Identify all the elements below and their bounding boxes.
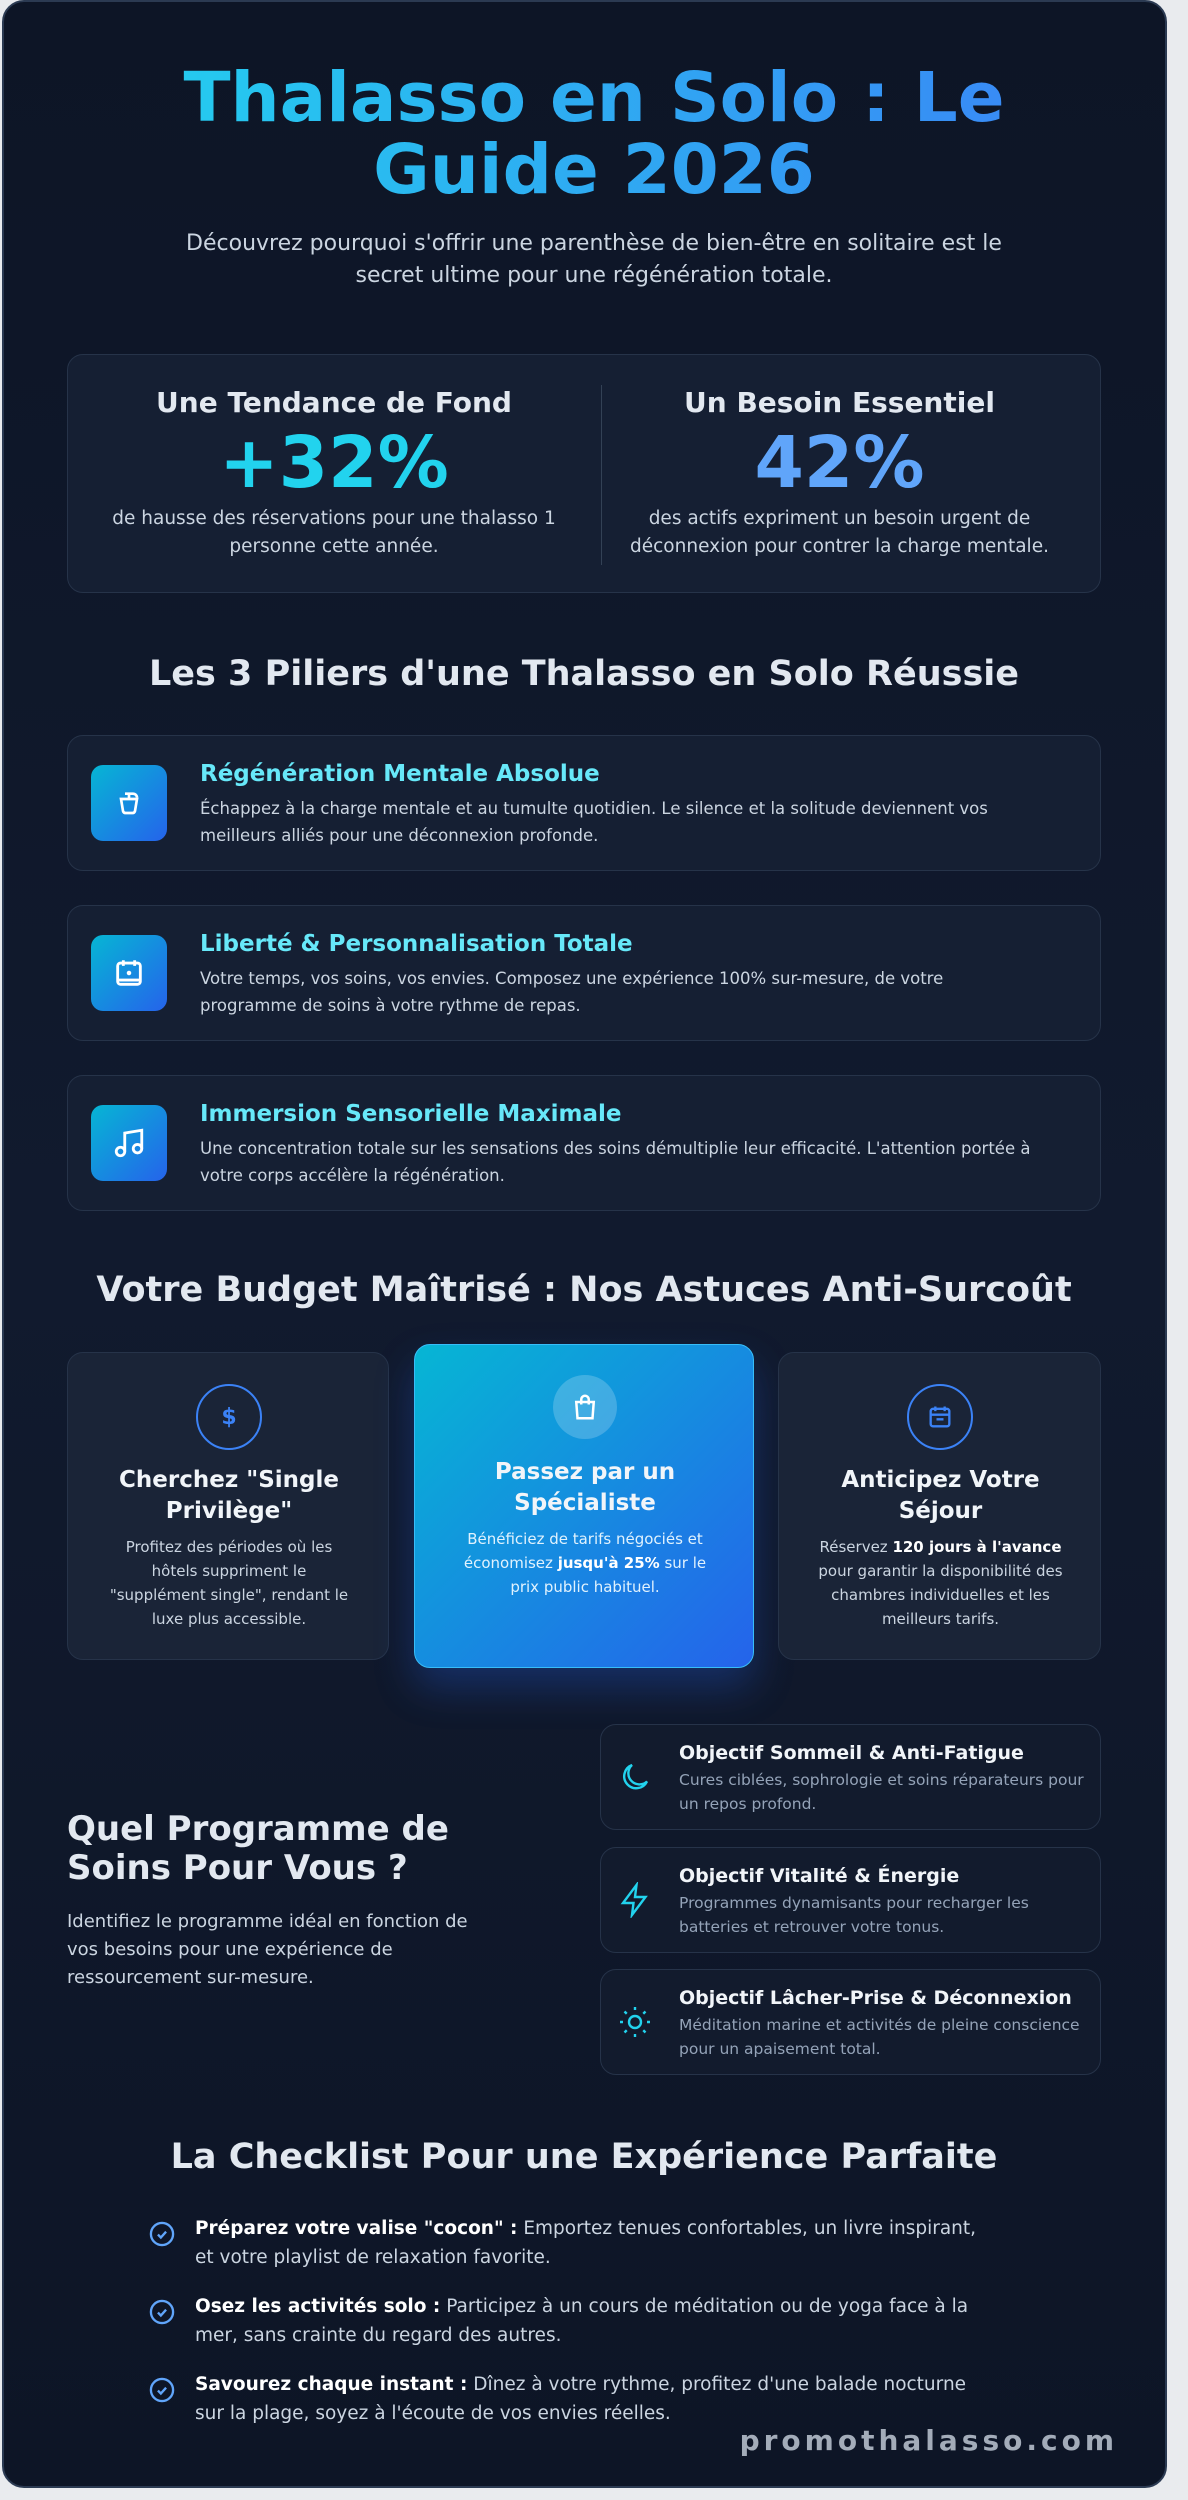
icon: sun <box>620 2007 650 2037</box>
objective 3: Objectif Lâcher-Prise & Déconnexion <box>679 1987 1072 2009</box>
icon: dollar: $ <box>221 1404 237 1430</box>
program intro: Identifiez le programme idéal en fonction de vos besoins pour une expérience de ressourcement sur-mesure. <box>67 1911 468 1988</box>
item 1: Préparez votre valise "cocon" : Emportez tenues confortables, un livre inspirant, et votre playlist de relaxation favorite. <box>195 2218 976 2268</box>
stat: tendance <box>112 386 556 557</box>
pillar 3 <box>67 1075 1101 1211</box>
objective 1: Objectif Sommeil & Anti-Fatigue <box>679 1742 1024 1764</box>
pillar 1: Régénération Mentale Absolue <box>200 761 600 787</box>
pillar 3: Une concentration totale sur les sensations des soins démultiplie leur efficacité. L'attention portée à votre corps accélère la régénération. <box>200 1139 1030 1185</box>
objective 2 <box>600 1847 1101 1953</box>
pillar 1 <box>67 735 1101 871</box>
item 2: Osez les activités solo : Participez à un cours de méditation ou de yoga face à la mer, sans crainte du regard des autres. <box>195 2296 968 2346</box>
pillar 2: Votre temps, vos soins, vos envies. Composez une expérience 100% sur-mesure, de votre programme de soins à votre rythme de repas. <box>200 969 943 1015</box>
objective 1: Cures ciblées, sophrologie et soins réparateurs pour un repos profond. <box>679 1771 1084 1813</box>
pillar 3: Immersion Sensorielle Maximale <box>200 1101 622 1127</box>
item 3: Savourez chaque instant : Dînez à votre rythme, profitez d'une balade nocturne sur la plage, soyez à l'écoute de vos envies réelles. <box>195 2374 966 2424</box>
program intro: Quel Programme de Soins Pour Vous ? <box>67 1809 449 1888</box>
panel: stats <box>67 354 1101 593</box>
budget card 1: Cherchez "Single Privilège" <box>119 1467 339 1524</box>
program intro <box>67 1809 468 1988</box>
budget card 3 <box>778 1352 1101 1660</box>
icon: calendar <box>907 1384 973 1450</box>
budget card 3: Réservez 120 jours à l'avance pour garantir la disponibilité des chambres individuelles et les meilleurs tarifs. <box>818 1538 1063 1628</box>
objective 1 <box>600 1724 1101 1830</box>
pillar 2 <box>67 905 1101 1041</box>
stat: besoin: Un Besoin Essentiel <box>684 386 995 419</box>
budget card 1 <box>67 1352 389 1660</box>
icon: moon <box>622 1764 648 1790</box>
title <box>60 62 1128 206</box>
stat: tendance: +32% <box>219 421 449 504</box>
budget card 3: Anticipez Votre Séjour <box>841 1467 1040 1524</box>
heading: budget: Votre Budget Maîtrisé : Nos Astuces Anti-Surcoût <box>96 1270 1072 1310</box>
objective 2: Objectif Vitalité & Énergie <box>679 1865 959 1887</box>
budget card 2 highlighted <box>414 1344 754 1668</box>
stat: besoin: des actifs expriment un besoin urgent de déconnexion pour contrer la charge mentale. <box>630 508 1049 557</box>
icon: calendar <box>91 935 167 1011</box>
checklist <box>150 2218 976 2424</box>
objective 3: Méditation marine et activités de pleine conscience pour un apaisement total. <box>679 2016 1080 2058</box>
icon: music <box>91 1105 167 1181</box>
budget card 2 highlighted: Passez par un Spécialiste <box>495 1459 675 1516</box>
heading: piliers: Les 3 Piliers d'une Thalasso en Solo Réussie <box>149 654 1019 694</box>
heading: checklist: La Checklist Pour une Expérience Parfaite <box>171 2137 997 2177</box>
objective 2: Programmes dynamisants pour recharger les batteries et retrouver votre tonus. <box>679 1894 1029 1936</box>
stat: besoin <box>630 386 1049 557</box>
title: Thalasso en Solo : Le <box>183 58 1005 138</box>
footer brand: promothalasso.com <box>740 2424 1118 2457</box>
pillar 2: Liberté & Personnalisation Totale <box>200 931 633 957</box>
title: Guide 2026 <box>373 130 815 210</box>
icon: brain <box>91 765 167 841</box>
stat: tendance: Une Tendance de Fond <box>156 386 512 419</box>
icon: bolt <box>620 1882 648 1918</box>
subtitle: Découvrez pourquoi s'offrir une parenthèse de bien-être en solitaire est le secret ultime pour une régénération totale. <box>186 231 1002 288</box>
stat: besoin: 42% <box>755 421 924 504</box>
objective 3 <box>600 1969 1101 2075</box>
stat: tendance: de hausse des réservations pour une thalasso 1 personne cette année. <box>112 508 556 557</box>
pillar 1: Échappez à la charge mentale et au tumulte quotidien. Le silence et la solitude deviennent vos meilleurs alliés pour une déconnexion profonde. <box>200 799 988 845</box>
icon: bag <box>553 1375 617 1439</box>
icon: dollar <box>196 1384 262 1450</box>
budget card 1: Profitez des périodes où les hôtels suppriment le "supplément single", rendant le luxe plus accessible. <box>110 1538 348 1628</box>
budget card 2 highlighted: Bénéficiez de tarifs négociés et économisez jusqu'à 25% sur le prix public habituel. <box>464 1530 706 1596</box>
